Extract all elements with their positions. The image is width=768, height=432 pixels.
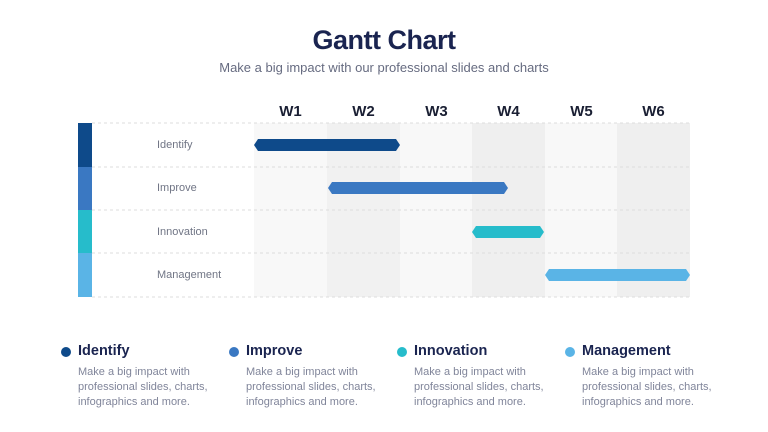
gantt chart <box>78 103 690 298</box>
gantt chart: W5 <box>570 103 593 120</box>
legend: Improve: Make a big impact with professional slides, charts, infographics and more. <box>246 366 376 408</box>
legend: Innovation: Innovation <box>414 343 487 359</box>
legend: Identify: Make a big impact with professional slides, charts, infographics and more. <box>78 366 208 408</box>
gantt chart: Management <box>157 269 221 281</box>
gantt chart: W3 <box>425 103 448 120</box>
legend: Innovation <box>397 343 544 408</box>
title: Gantt Chart <box>312 25 456 55</box>
legend: Identify <box>61 343 208 408</box>
legend: Management: Make a big impact with professional slides, charts, infographics and more. <box>582 366 712 408</box>
legend: Management: Management <box>582 343 671 359</box>
legend: Innovation: Make a big impact with professional slides, charts, infographics and more. <box>414 366 544 408</box>
legend: Improve: Improve <box>246 343 302 359</box>
gantt chart: W4 <box>497 103 520 120</box>
gantt chart: Improve <box>157 182 197 194</box>
subtitle: Make a big impact with our professional slides and charts <box>219 60 549 75</box>
legend: Management <box>565 343 712 408</box>
legend: Identify: Identify <box>78 343 130 359</box>
gantt chart: Identify <box>157 139 192 151</box>
gantt chart: W6 <box>642 103 665 120</box>
gantt chart: W1 <box>279 103 302 120</box>
legend: Improve <box>229 343 376 408</box>
gantt chart: W2 <box>352 103 375 120</box>
gantt chart: Innovation <box>157 226 208 238</box>
